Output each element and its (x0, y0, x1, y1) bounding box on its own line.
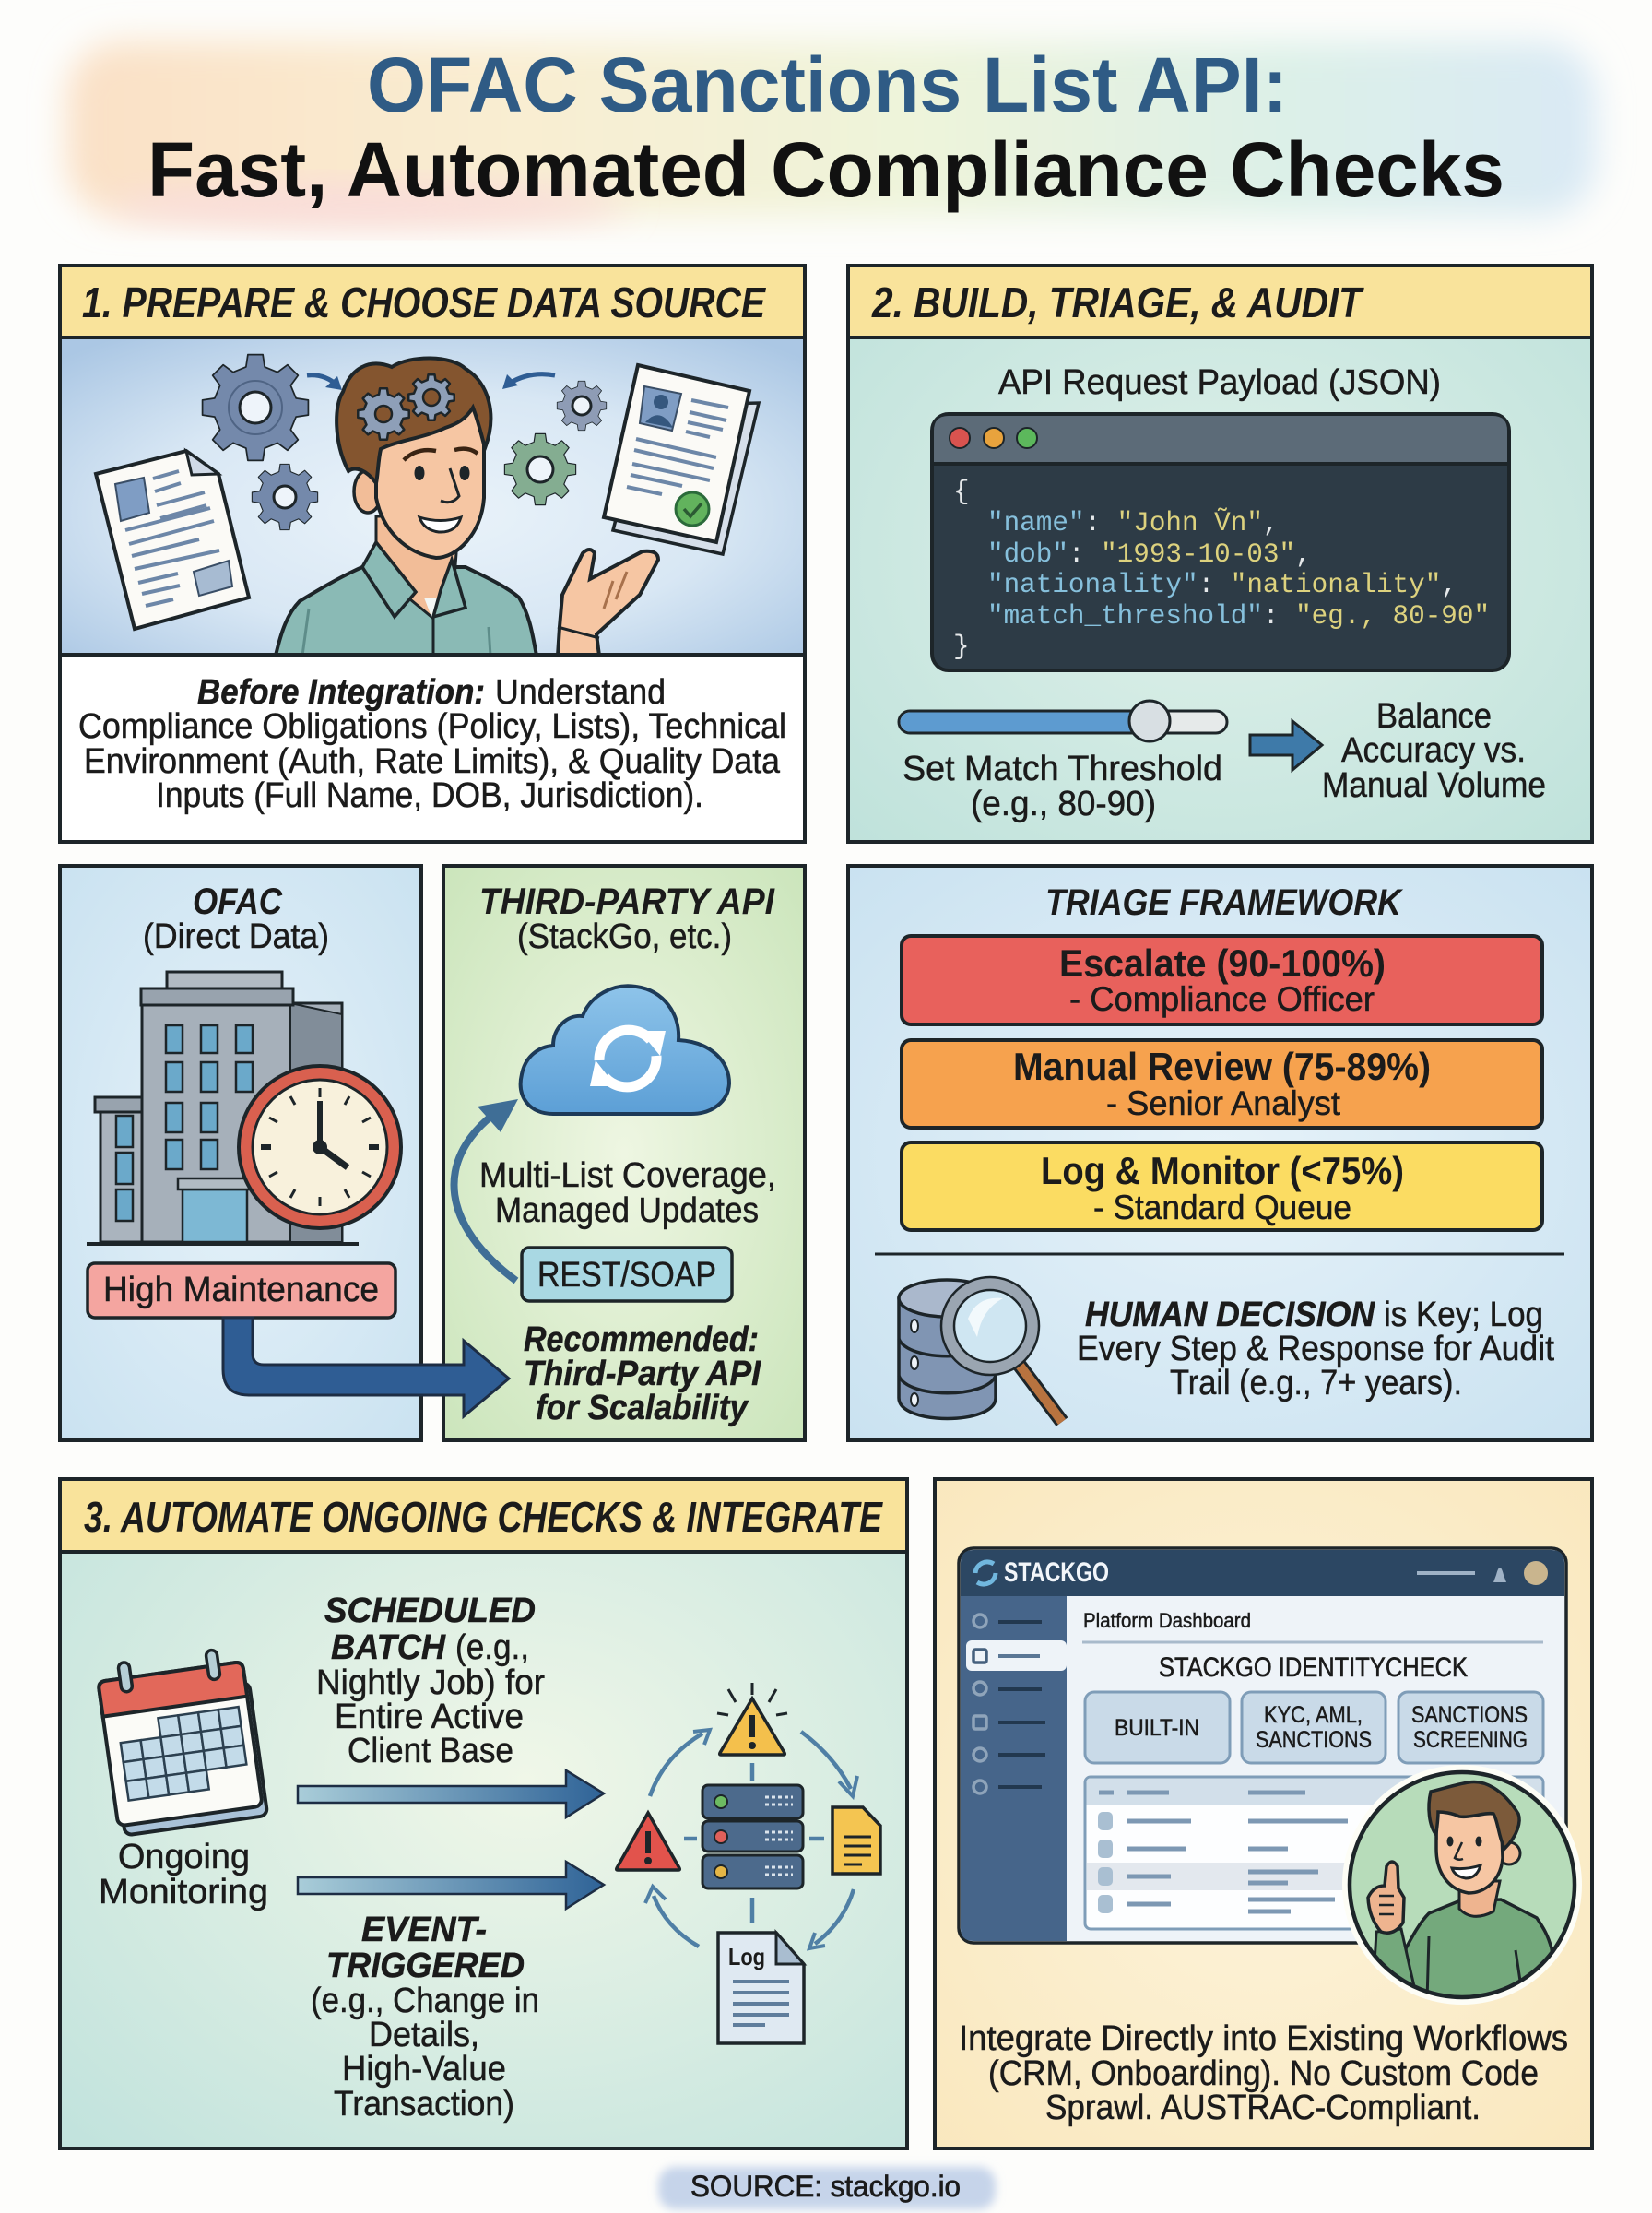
heading: automate: 3. AUTOMATE ONGOING CHECKS & INTEGRATE (84, 1493, 883, 1541)
card: built-in: BUILT-IN (1115, 1715, 1199, 1741)
arrow: batch (298, 1770, 604, 1817)
dashboard title: STACKGO IDENTITYCHECK (1159, 1652, 1468, 1683)
card: sanctions screening: SANCTIONS (1411, 1702, 1528, 1728)
label: high maintenance (88, 1263, 395, 1318)
arrow: high maintenance to third-party (223, 1318, 509, 1416)
heading: third-party: THIRD-PARTY API (479, 882, 775, 922)
code lines (953, 477, 1490, 662)
label: ongoing monitoring: Ongoing (118, 1838, 250, 1876)
icon: smiling person with thumbs up (1342, 1765, 1582, 2010)
text: integrate directly: (CRM, Onboarding). No Custom Code (988, 2054, 1539, 2093)
bar: escalate: Escalate (90-100%) (1059, 941, 1386, 985)
label: ongoing monitoring (99, 1838, 268, 1911)
card: kyc (1242, 1692, 1386, 1763)
text: human decision: Every Step & Response for Audit (1077, 1330, 1554, 1368)
text: balance: Accuracy vs. (1341, 731, 1526, 770)
bar: escalate (902, 936, 1542, 1024)
source pill: SOURCE: stackgo.io (690, 2170, 961, 2203)
code lines: "dob": "1993-10-03", (987, 539, 1312, 570)
panel: triage framework (848, 866, 1592, 1440)
icon: calendar (96, 1646, 267, 1836)
bar: log and monitor (902, 1142, 1542, 1230)
dashboard sidebar (961, 1596, 1067, 1941)
text: before integration (78, 673, 786, 815)
text: event-triggered: Transaction) (334, 2085, 514, 2124)
icon: yellow document (832, 1807, 880, 1874)
subheading: stackgo: (StackGo, etc.) (517, 917, 732, 956)
bar: log and monitor: - Standard Queue (1093, 1189, 1351, 1226)
icon: right document with check (604, 365, 759, 554)
text: multi-list coverage: Multi-List Coverage, (479, 1156, 776, 1195)
panel: 3. automate (60, 1479, 907, 2148)
table (1085, 1777, 1543, 1929)
text: recommended: Third-Party API (524, 1355, 761, 1393)
code lines: "name": "John Ṽn", (987, 507, 1280, 538)
text: scheduled batch: BATCH (331, 1628, 446, 1667)
subheading: direct data: (Direct Data) (143, 917, 329, 956)
slider (899, 701, 1227, 741)
text: human decision (1077, 1296, 1554, 1402)
card: built-in (1085, 1692, 1230, 1763)
text: recommended: for Scalability (536, 1389, 749, 1427)
heading: prepare: 1. PREPARE & CHOOSE DATA SOURCE (82, 278, 766, 326)
bar: manual review: Manual Review (75-89%) (1013, 1045, 1431, 1088)
heading: triage: TRIAGE FRAMEWORK (1045, 882, 1404, 923)
label: set match threshold: (e.g., 80-90) (971, 785, 1156, 823)
text: human decision: is Key; Log (1384, 1296, 1543, 1334)
icon: server (702, 1785, 803, 1888)
text: before integration: Compliance Obligations (Policy, Lists), Technical (78, 707, 786, 746)
text: scheduled batch: Entire Active (335, 1698, 524, 1736)
code lines: { (953, 477, 970, 507)
icon: log document (718, 1933, 804, 2043)
source pill (658, 2167, 996, 2209)
panel: OFAC direct data (60, 866, 421, 1440)
icon: curved arrows (307, 375, 337, 385)
label: set match threshold (903, 750, 1222, 823)
icon: red warning (617, 1813, 679, 1870)
text: multi-list coverage (479, 1156, 776, 1230)
text: scheduled batch: SCHEDULED (324, 1592, 536, 1630)
title line 1: OFAC Sanctions List API: (367, 41, 1288, 128)
text: integrate directly (959, 2019, 1568, 2127)
text: balance: Balance (1376, 697, 1492, 736)
arrow: event (298, 1862, 604, 1909)
code lines: "nationality": "nationality", (987, 570, 1457, 600)
card: kyc: SANCTIONS (1256, 1727, 1372, 1753)
icon: building (87, 972, 359, 1244)
illustration: person with gears and documents (62, 339, 803, 656)
bar: log and monitor: Log & Monitor (<75%) (1041, 1149, 1404, 1192)
icon: left document (96, 451, 249, 629)
text: recommended (524, 1320, 761, 1427)
heading: OFAC: OFAC (193, 882, 283, 922)
panel: third-party API (443, 866, 805, 1440)
dashboard header: STACKGO (1004, 1557, 1109, 1588)
dashboard mockup (959, 1548, 1566, 1943)
text: human decision: HUMAN DECISION (1085, 1296, 1375, 1334)
text: scheduled batch: (e.g., (455, 1628, 529, 1667)
code lines: } (953, 632, 970, 662)
text: event-triggered: High-Value (342, 2050, 506, 2089)
text: before integration: Environment (Auth, Rate Limits), & Quality Data (84, 742, 781, 781)
text: recommended: Recommended: (524, 1320, 759, 1359)
text: balance (1322, 697, 1546, 805)
text: before integration: Inputs (Full Name, DOB, Jurisdiction). (156, 776, 703, 815)
text: human decision: Trail (e.g., 7+ years). (1170, 1364, 1462, 1402)
label: set match threshold: Set Match Threshold (903, 750, 1222, 788)
label: REST/SOAP (522, 1248, 732, 1301)
text: scheduled batch (316, 1592, 545, 1770)
panel: stackgo integration (935, 1479, 1592, 2148)
text: multi-list coverage: Managed Updates (495, 1191, 759, 1230)
icon: clock (239, 1066, 401, 1228)
card: kyc: KYC, AML, (1264, 1702, 1363, 1728)
text: before integration: Before Integration: (197, 673, 485, 712)
icon: yellow warning (717, 1683, 787, 1755)
card: sanctions screening (1398, 1692, 1543, 1763)
code lines: "match_threshold": "eg., 80-90" (987, 601, 1490, 632)
bar: escalate: - Compliance Officer (1069, 980, 1375, 1018)
dashboard label: Platform Dashboard (1083, 1609, 1251, 1632)
text: event-triggered: TRIGGERED (326, 1947, 525, 1985)
arrow: rest to cloud (454, 1099, 518, 1281)
icon: cycle arrows (645, 1730, 857, 1948)
subheading: payload: API Request Payload (JSON) (998, 363, 1441, 402)
text: event-triggered: EVENT- (361, 1911, 487, 1949)
label: ongoing monitoring: Monitoring (99, 1873, 268, 1911)
label: high maintenance: High Maintenance (103, 1271, 379, 1309)
text: integrate directly: Integrate Directly into Existing Workflows (959, 2019, 1568, 2058)
text: before integration: Understand (495, 673, 666, 712)
code window (932, 414, 1509, 670)
icon: cloud (521, 986, 729, 1114)
text: integrate directly: Sprawl. AUSTRAC-Compliant. (1045, 2089, 1481, 2127)
text: event-triggered: (e.g., Change in (311, 1982, 539, 2020)
text: scheduled batch: Client Base (348, 1732, 513, 1770)
card: sanctions screening: SCREENING (1413, 1727, 1528, 1753)
text: scheduled batch: Nightly Job) for (316, 1663, 545, 1702)
title line 2: Fast, Automated Compliance Checks (148, 126, 1504, 213)
icon: gears (203, 355, 607, 530)
bar: manual review (902, 1040, 1542, 1128)
arrow: to balance (1250, 721, 1322, 770)
text: event-triggered: Details, (369, 2016, 479, 2054)
icon: person (276, 358, 658, 656)
title banner (66, 41, 1597, 227)
heading: build: 2. BUILD, TRIAGE, & AUDIT (871, 278, 1364, 326)
icon: database with magnifier (899, 1277, 1062, 1422)
panel: 2. build, triage and audit (848, 266, 1592, 842)
dashboard header (961, 1550, 1564, 1596)
icon: log document: Log (728, 1943, 765, 1970)
text: balance: Manual Volume (1322, 766, 1546, 805)
label: REST/SOAP: REST/SOAP (537, 1256, 716, 1295)
panel: 1. prepare (60, 266, 805, 842)
bar: manual review: - Senior Analyst (1106, 1084, 1341, 1122)
icon: server cycle (617, 1683, 880, 2043)
text: event-triggered (311, 1911, 539, 2124)
